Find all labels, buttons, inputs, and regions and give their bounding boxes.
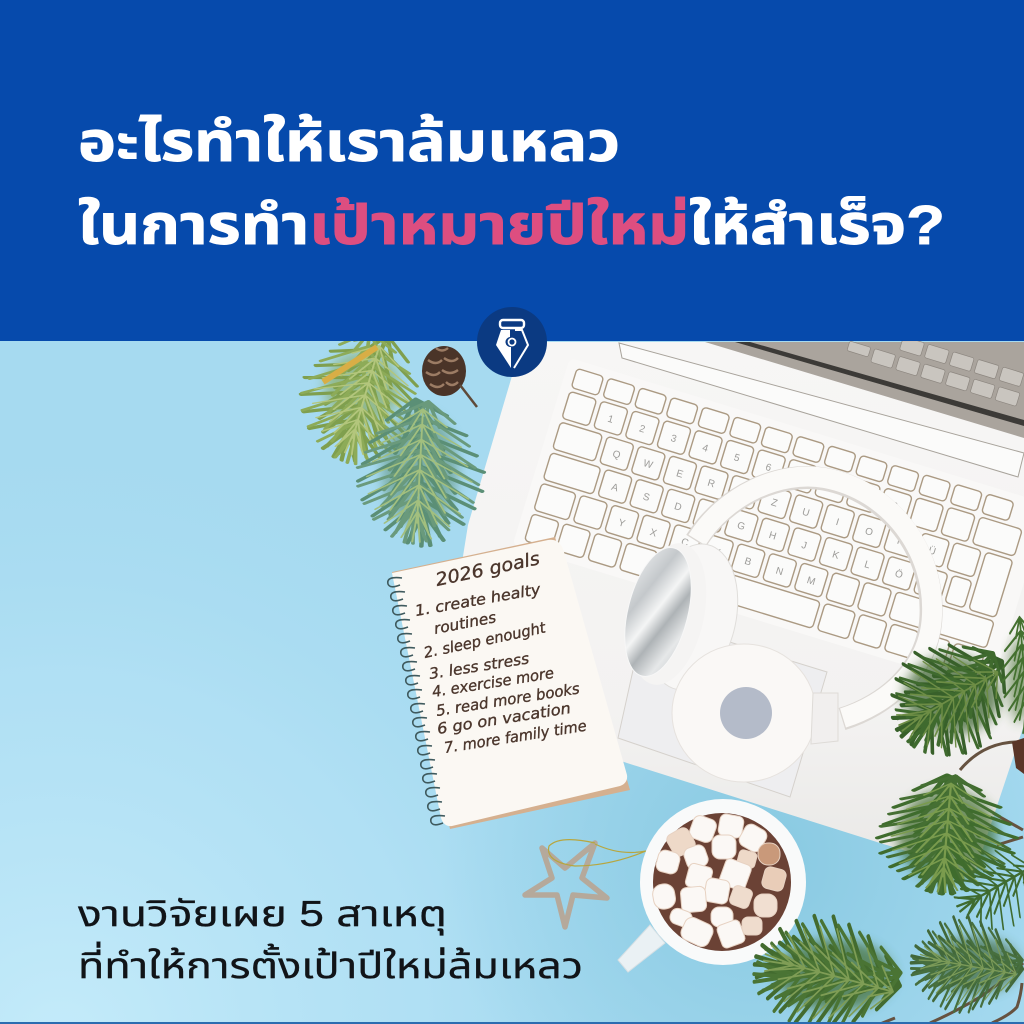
keyboard: 7 xyxy=(796,472,804,484)
keyboard: U xyxy=(801,507,811,519)
keyboard: G xyxy=(736,520,746,533)
keyboard: 5 xyxy=(732,452,741,465)
keyboard: 1 xyxy=(606,414,615,426)
keyboard: J xyxy=(800,540,808,552)
keyboard: X xyxy=(648,527,658,540)
keyboard: L xyxy=(863,559,872,571)
pine branches: lower right xyxy=(745,615,1024,1024)
keyboard: 3 xyxy=(669,433,678,445)
title xyxy=(78,111,945,256)
goals handwritten list: 5. read more books xyxy=(435,679,581,720)
keyboard: H xyxy=(767,530,778,543)
left ear cup xyxy=(613,535,750,699)
keyboard: Q xyxy=(611,449,622,462)
sprig upper right xyxy=(866,615,1024,781)
headband xyxy=(696,477,932,719)
trackpad xyxy=(618,616,827,797)
headphones xyxy=(613,477,932,782)
title: อะไรทำให้เราล้มเหลว xyxy=(78,111,620,173)
keyboard: 6 xyxy=(764,462,773,474)
pine cone fragment xyxy=(1012,738,1024,774)
hinge strip xyxy=(619,343,1024,477)
star ornament xyxy=(525,840,646,927)
keyboard: 4 xyxy=(701,443,710,455)
twigs xyxy=(880,742,1024,1024)
light green sprig xyxy=(281,312,444,481)
subtitle text: งานวิจัยเผย 5 สาเหตุ xyxy=(78,893,447,935)
notebook xyxy=(388,537,630,829)
notebook page xyxy=(392,540,627,826)
keyboard: Ü xyxy=(927,544,937,558)
goals handwritten list: 1. create healty xyxy=(414,580,543,620)
keyboard: 0 xyxy=(890,501,899,513)
keyboard: F xyxy=(705,511,714,523)
laptop base xyxy=(440,342,1024,872)
cocoa xyxy=(653,813,791,951)
goals handwritten list: 6 go on vacation xyxy=(436,699,572,738)
goals handwritten list: 3. less stress xyxy=(428,649,531,683)
keyboard: O xyxy=(864,526,874,539)
goals handwritten list: 2026 goals xyxy=(434,548,542,591)
keyboard xyxy=(513,358,1024,691)
sprig lower right xyxy=(907,911,1024,1018)
goals handwritten list: 2. sleep enought xyxy=(422,618,548,662)
goals handwritten list xyxy=(414,548,588,757)
keyboard: 2 xyxy=(638,423,647,436)
right ear cup xyxy=(672,644,838,782)
keyboard: W xyxy=(642,458,655,472)
mug body xyxy=(640,799,806,965)
keyboard: I xyxy=(834,517,840,528)
notebook cover edge xyxy=(392,537,630,829)
keyboard: A xyxy=(610,482,620,494)
mug handle xyxy=(618,925,665,972)
goals handwritten list: 4. exercise more xyxy=(431,664,555,701)
keyboard: D xyxy=(673,501,683,514)
keyboard: 8 xyxy=(827,481,836,494)
keyboard: Z xyxy=(770,497,779,510)
keyboard: R xyxy=(706,478,716,490)
goals handwritten list: routines xyxy=(432,608,498,638)
header banner xyxy=(0,0,1024,341)
keyboard: E xyxy=(675,468,685,481)
pine branch: top left with pine cone xyxy=(281,312,489,551)
sprig lower center xyxy=(745,905,910,1024)
subtitle text: ที่ทำให้การตั้งเป้าปีใหม่ล้มเหลว xyxy=(78,941,583,986)
keyboard: T xyxy=(738,488,747,500)
keyboard: B xyxy=(743,556,753,569)
keyboard: S xyxy=(641,491,651,504)
laptop screen wedge xyxy=(705,322,1024,438)
background: light blue surface xyxy=(0,340,1024,1024)
keyboard: K xyxy=(831,549,841,562)
keyboard: M xyxy=(805,575,817,588)
pine cone xyxy=(422,346,477,407)
keyboard: Ö xyxy=(893,568,905,581)
title: ในการทำ เป้าหมายปีใหม่ ให้สำเร็จ? xyxy=(78,194,945,256)
keyboard: Y xyxy=(617,517,627,530)
keyboard: V xyxy=(711,546,721,559)
laptop xyxy=(440,322,1024,872)
bottom edge line xyxy=(0,1022,1024,1024)
subtitle text xyxy=(78,893,583,986)
mug of hot cocoa xyxy=(618,799,806,972)
sprig middle right xyxy=(871,764,1024,945)
spiral binding xyxy=(388,578,445,825)
logo badge: fountain pen nib xyxy=(477,307,547,377)
keyboard: P xyxy=(896,536,906,548)
goals handwritten list: 7. more family time xyxy=(443,717,588,757)
blue green sprig xyxy=(348,393,489,551)
keyboard: 9 xyxy=(859,491,868,503)
keyboard: N xyxy=(774,566,784,578)
keyboard: C xyxy=(680,537,690,549)
marshmallows xyxy=(651,813,787,949)
